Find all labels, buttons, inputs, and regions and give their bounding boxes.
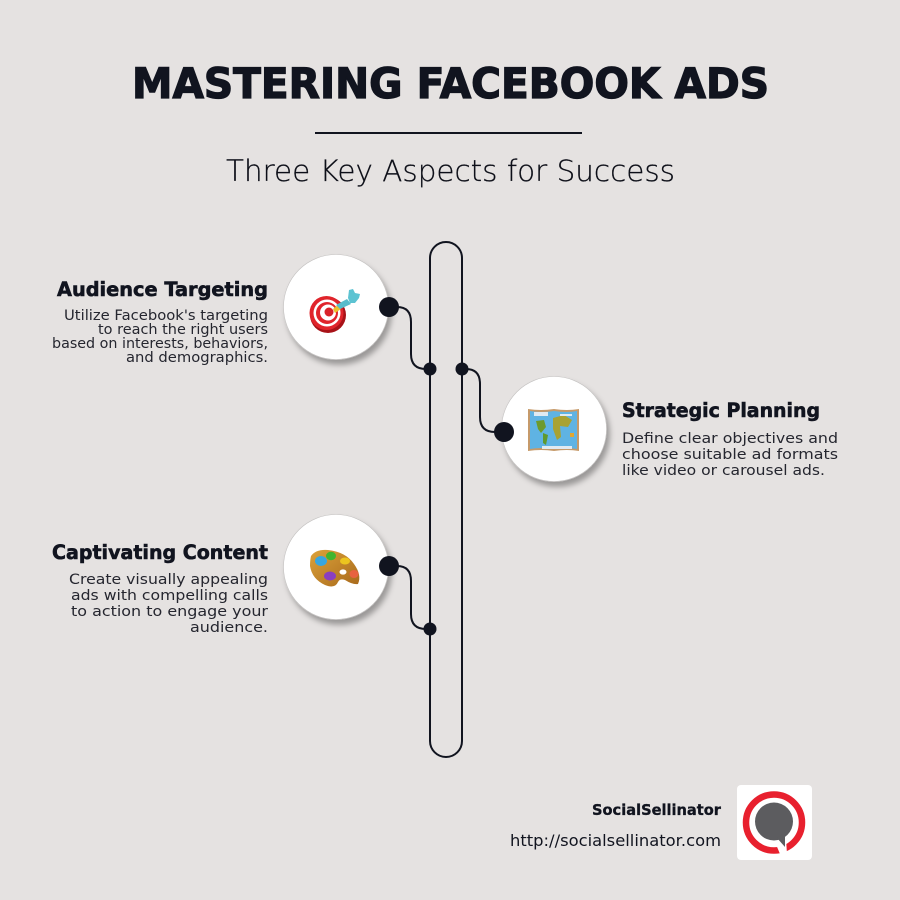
connector dot: map bbox=[494, 422, 514, 442]
title: MASTERING FACEBOOK ADS bbox=[132, 59, 769, 108]
panel: strategic planning text bbox=[622, 399, 838, 479]
text block: captivating content: to action to engage your bbox=[71, 604, 268, 620]
text block: captivating content bbox=[69, 572, 268, 636]
circle: palette bbox=[284, 514, 388, 620]
heading: strategic planning: Strategic Planning bbox=[622, 399, 820, 422]
text block: audience targeting bbox=[52, 308, 268, 366]
text block: audience targeting: to reach the right users bbox=[98, 322, 268, 338]
connector: audience targeting bbox=[389, 307, 430, 369]
panel: audience targeting text bbox=[52, 278, 268, 366]
text block: strategic planning: Define clear objectives and bbox=[622, 431, 838, 447]
subtitle: Three Key Aspects for Success bbox=[226, 154, 675, 188]
connector dot: target bbox=[379, 297, 399, 317]
timeline pill bbox=[430, 242, 462, 757]
junction dot: map bbox=[456, 362, 468, 376]
heading: audience targeting: Audience Targeting bbox=[57, 278, 268, 301]
text block: strategic planning bbox=[622, 431, 838, 479]
brand name: SocialSellinator bbox=[592, 801, 722, 819]
icon: dart and target bbox=[310, 289, 360, 333]
text block: captivating content: Create visually appealing bbox=[69, 572, 268, 588]
heading: captivating content: Captivating Content bbox=[52, 541, 268, 564]
text block: strategic planning: like video or carousel ads. bbox=[622, 463, 825, 479]
connector: strategic planning bbox=[462, 369, 504, 432]
logo bbox=[737, 785, 812, 860]
circle: target bbox=[284, 254, 388, 360]
text block: audience targeting: based on interests, behaviors, bbox=[52, 336, 268, 352]
text block: audience targeting: Utilize Facebook's targeting bbox=[64, 308, 268, 324]
brand url: http://socialsellinator.com bbox=[510, 831, 721, 850]
connector: captivating content bbox=[389, 566, 430, 629]
circle: map bbox=[502, 376, 606, 482]
text block: strategic planning: choose suitable ad formats bbox=[622, 447, 838, 463]
text block: captivating content: audience. bbox=[190, 620, 268, 636]
text block: audience targeting: and demographics. bbox=[126, 350, 268, 366]
junction dot: palette bbox=[424, 622, 436, 636]
junction dot: target bbox=[424, 362, 436, 376]
connector dot: palette bbox=[379, 556, 399, 576]
panel: captivating content text bbox=[52, 541, 268, 636]
icon: world map bbox=[528, 409, 579, 451]
icon: paint palette bbox=[310, 550, 359, 586]
text block: captivating content: ads with compelling calls bbox=[71, 588, 268, 604]
title underline bbox=[315, 132, 582, 134]
